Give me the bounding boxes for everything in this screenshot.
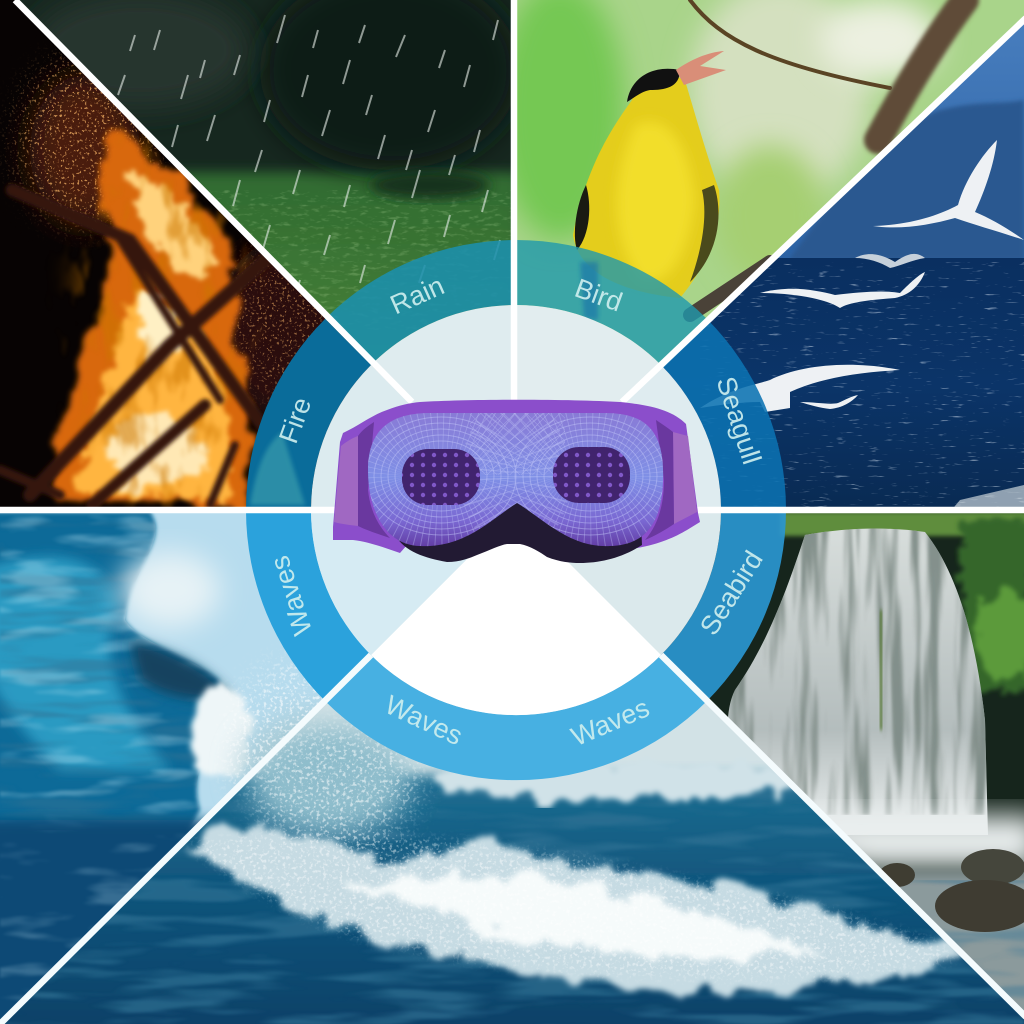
ring segment: seabird: [661, 510, 786, 701]
rocks and pool: [882, 849, 1024, 1010]
panel: ocean surf photo: [4, 568, 1024, 1024]
right strap panel: [673, 432, 697, 524]
ring segment: seagull: [661, 319, 786, 510]
panel: seagull photo: [664, 24, 1024, 507]
label: Waves bottom left: Waves: [381, 689, 467, 751]
inner disc: right: [516, 365, 721, 510]
inner disc: lower right: [516, 510, 721, 655]
inner seam right: [645, 420, 674, 540]
inner disc: lower left: [311, 510, 516, 655]
flames: [50, 130, 251, 505]
panel: fire photo: [0, 0, 380, 507]
panel: rain photo: [20, 0, 511, 360]
label: Fire: Fire: [273, 393, 317, 447]
seagulls: [700, 140, 1024, 412]
mask strap: [333, 400, 700, 553]
ring segment: fire: [246, 319, 371, 510]
logs: [0, 190, 268, 505]
ring segment: bottom waves: [325, 655, 707, 780]
label: Seagull: Seagull: [711, 373, 767, 468]
label: Waves left: Waves: [264, 552, 318, 639]
ring of sound labels: [246, 240, 786, 780]
mesh eye pad: [368, 413, 664, 546]
wave barrel: [0, 513, 235, 830]
inner disc: top right: [516, 305, 661, 510]
inner disc: top left: [311, 365, 516, 510]
falling water: [720, 525, 1024, 868]
label: Bird: Bird: [571, 273, 626, 318]
left eye cup: [402, 449, 480, 505]
ring segment: bird: [516, 240, 707, 365]
fire ring reflection: [250, 432, 305, 505]
label: Seabird: Seabird: [694, 546, 769, 640]
right eye cup: [553, 447, 630, 503]
inner seam left: [358, 422, 390, 538]
inner disc: bottom white wedge: [371, 510, 661, 715]
yellow bird: [573, 51, 726, 298]
bird tail under ring: [580, 262, 598, 320]
rain streaks: [118, 15, 500, 300]
foam crest: [180, 810, 970, 1000]
panel: big wave photo: [0, 513, 370, 1020]
panel: bird photo: [517, 0, 1024, 362]
tree branches: [690, 0, 965, 315]
sleep mask: [333, 400, 700, 563]
label: Waves bottom right: Waves: [567, 693, 654, 752]
left strap panel: [334, 436, 358, 526]
nose foam: [395, 480, 642, 563]
ring segment: left waves: [246, 510, 371, 701]
label: Rain: Rain: [386, 270, 449, 320]
ring segment: rain: [325, 240, 516, 365]
panel: waterfall photo: [662, 513, 1024, 1010]
inner disc: top: [371, 305, 516, 510]
foam spray: [100, 533, 322, 787]
